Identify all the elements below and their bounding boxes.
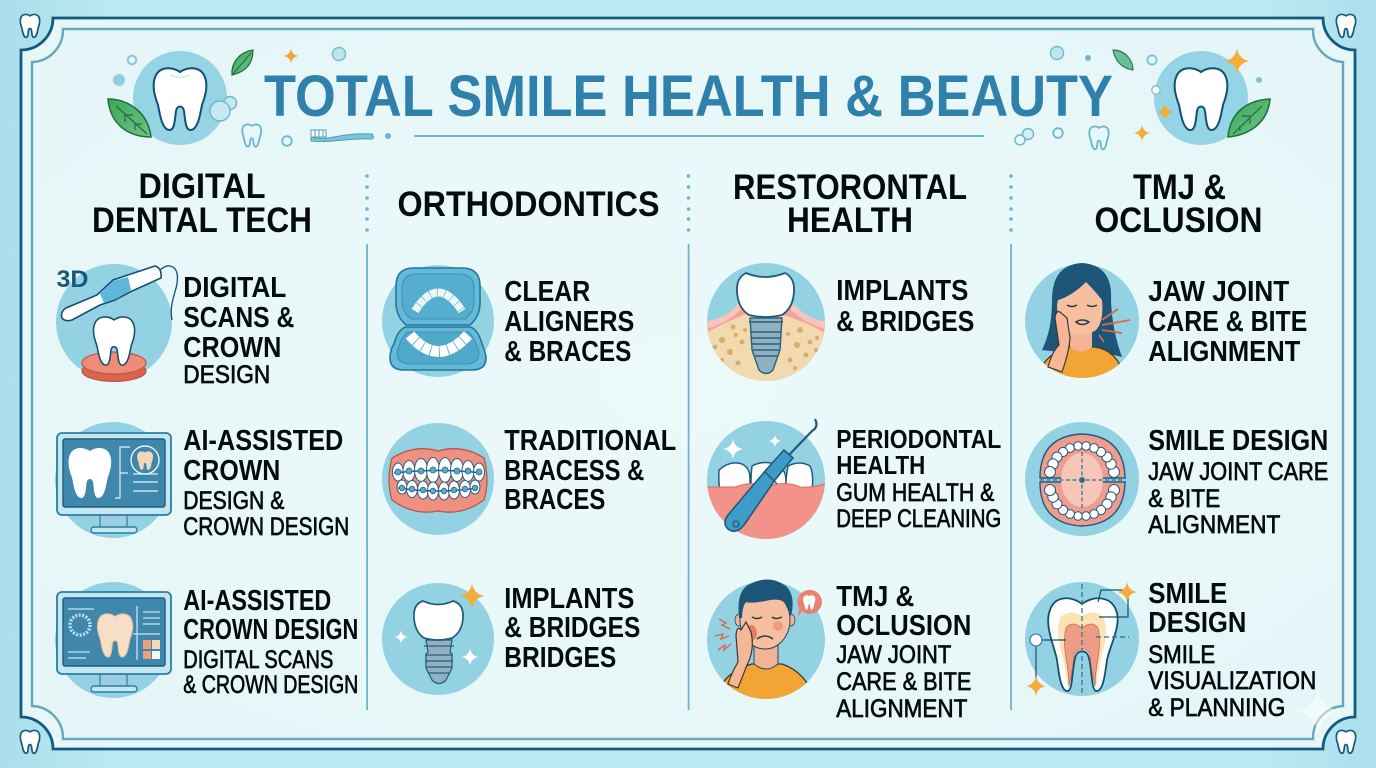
text: implants and bridges: BRIDGES <box>504 642 616 674</box>
text: jaw joint care: CARE & BITE <box>1148 306 1307 338</box>
text: jaw joint care <box>1148 276 1307 368</box>
text: smile design and planning <box>1148 578 1316 722</box>
text: ai-assisted crown design, digital scans: CROWN DESIGN <box>183 614 358 646</box>
icon: man with jaw pain <box>707 579 825 700</box>
text: traditional braces <box>504 425 676 516</box>
text: smile design, jaw joint care <box>1148 425 1328 539</box>
text: traditional braces: TRADITIONAL <box>504 425 676 457</box>
text: smile design and planning: DESIGN <box>1148 607 1246 639</box>
title: TOTAL SMILE HEALTH & BEAUTY <box>264 64 1113 129</box>
heading: restorontal health <box>733 168 967 240</box>
icon: clear aligner case <box>382 265 494 377</box>
text: smile design, jaw joint care: & BITE <box>1148 485 1220 513</box>
heading: orthodontics: ORTHODONTICS <box>398 185 660 224</box>
text: implants and bridges: & BRIDGES <box>504 612 640 644</box>
icon: tooth cross section <box>1025 582 1139 696</box>
text: smile design and planning: VISUALIZATION <box>1148 667 1316 695</box>
text: traditional braces: BRACES <box>504 484 605 516</box>
icon: periodontal cleaning tool <box>707 418 825 539</box>
text: smile design, jaw joint care: ALIGNMENT <box>1148 511 1280 539</box>
text: ai-assisted crown design: CROWN <box>183 455 280 487</box>
icon: intraoral scanner and crown <box>56 264 177 382</box>
heading: tmj and oclusion: OCLUSION <box>1094 201 1262 240</box>
heading: tmj and oclusion: TMJ & <box>1133 168 1226 207</box>
text: smile design and planning: SMILE <box>1148 578 1227 610</box>
text: smile design and planning: & PLANNING <box>1148 694 1285 722</box>
text: clear aligners and braces: ALIGNERS <box>504 306 634 338</box>
icon: woman with jaw pain <box>1025 263 1139 380</box>
title underline <box>414 135 984 137</box>
text: implants and bridges, restorative: & BRIDGES <box>836 306 974 338</box>
heading: digital dental tech: DIGITAL <box>138 167 266 206</box>
icon: monitor with crown design <box>55 582 171 698</box>
text: tmj and oclusion care: OCLUSION <box>836 610 971 642</box>
text: ai-assisted crown design <box>183 425 349 541</box>
heading: tmj and oclusion <box>1094 168 1262 240</box>
text: periodontal health: PERIODONTAL <box>836 424 1001 454</box>
column dividers <box>365 174 1013 710</box>
text: smile design, jaw joint care: JAW JOINT CARE <box>1148 458 1328 486</box>
text: ai-assisted crown design, digital scans: AI-ASSISTED <box>183 585 331 617</box>
text: clear aligners and braces: & BRACES <box>504 336 631 368</box>
text: smile design and planning: SMILE <box>1148 641 1215 669</box>
text: tmj and oclusion care: TMJ & <box>836 581 914 613</box>
text: ai-assisted crown design: CROWN DESIGN <box>183 513 349 541</box>
text: ai-assisted crown design, digital scans: & CROWN DESIGN <box>183 671 358 699</box>
sparkle: bottom right <box>1296 689 1340 733</box>
text: clear aligners and braces <box>504 276 634 368</box>
heading: digital dental tech <box>92 167 312 240</box>
text: digital scans and crown design <box>183 272 294 389</box>
text: digital scans and crown design: CROWN <box>183 332 281 364</box>
text: traditional braces: BRACESS & <box>504 455 644 487</box>
text: implants and bridges: IMPLANTS <box>504 583 634 615</box>
heading: restorontal health: HEALTH <box>787 201 913 240</box>
text: tmj and oclusion care <box>836 581 971 723</box>
text: ai-assisted crown design: DESIGN & <box>183 487 285 515</box>
text: ai-assisted crown design, digital scans: DIGITAL SCANS <box>183 646 333 674</box>
text: implants and bridges <box>504 583 640 674</box>
text: digital scans and crown design: SCANS & <box>183 302 294 334</box>
text: tmj and oclusion care: ALIGNMENT <box>836 695 967 723</box>
text: digital scans and crown design: DESIGN <box>183 361 270 389</box>
text: implants and bridges, restorative: IMPLANTS <box>836 275 968 307</box>
icon: intraoral scanner and crown: 3D <box>56 266 88 293</box>
text: ai-assisted crown design, digital scans <box>183 585 358 699</box>
text: jaw joint care: ALIGNMENT <box>1148 336 1301 368</box>
heading: restorontal health: RESTORONTAL <box>733 168 967 207</box>
heading: digital dental tech: DENTAL TECH <box>92 201 312 240</box>
text: periodontal health: HEALTH <box>836 450 925 480</box>
icon: dental implant with sparkles <box>382 583 494 695</box>
text: tmj and oclusion care: JAW JOINT <box>836 641 951 669</box>
icon: dental arches <box>1025 422 1139 536</box>
icon: implant in jawbone <box>707 263 825 381</box>
text: clear aligners and braces: CLEAR <box>504 276 590 308</box>
text: periodontal health: GUM HEALTH & <box>836 479 995 507</box>
text: periodontal health <box>836 424 1001 533</box>
text: jaw joint care: JAW JOINT <box>1148 276 1290 308</box>
header decoration: right <box>1015 46 1270 149</box>
text: ai-assisted crown design: AI-ASSISTED <box>183 425 343 457</box>
text: periodontal health: DEEP CLEANING <box>836 505 1001 533</box>
text: implants and bridges, restorative <box>836 275 974 338</box>
text: smile design, jaw joint care: SMILE DESIGN <box>1148 425 1328 457</box>
icon: traditional braces <box>382 423 494 535</box>
text: digital scans and crown design: DIGITAL <box>183 272 286 304</box>
header decoration: left <box>108 48 391 147</box>
text: tmj and oclusion care: CARE & BITE <box>836 668 971 696</box>
icon: monitor with tooth <box>55 422 171 538</box>
